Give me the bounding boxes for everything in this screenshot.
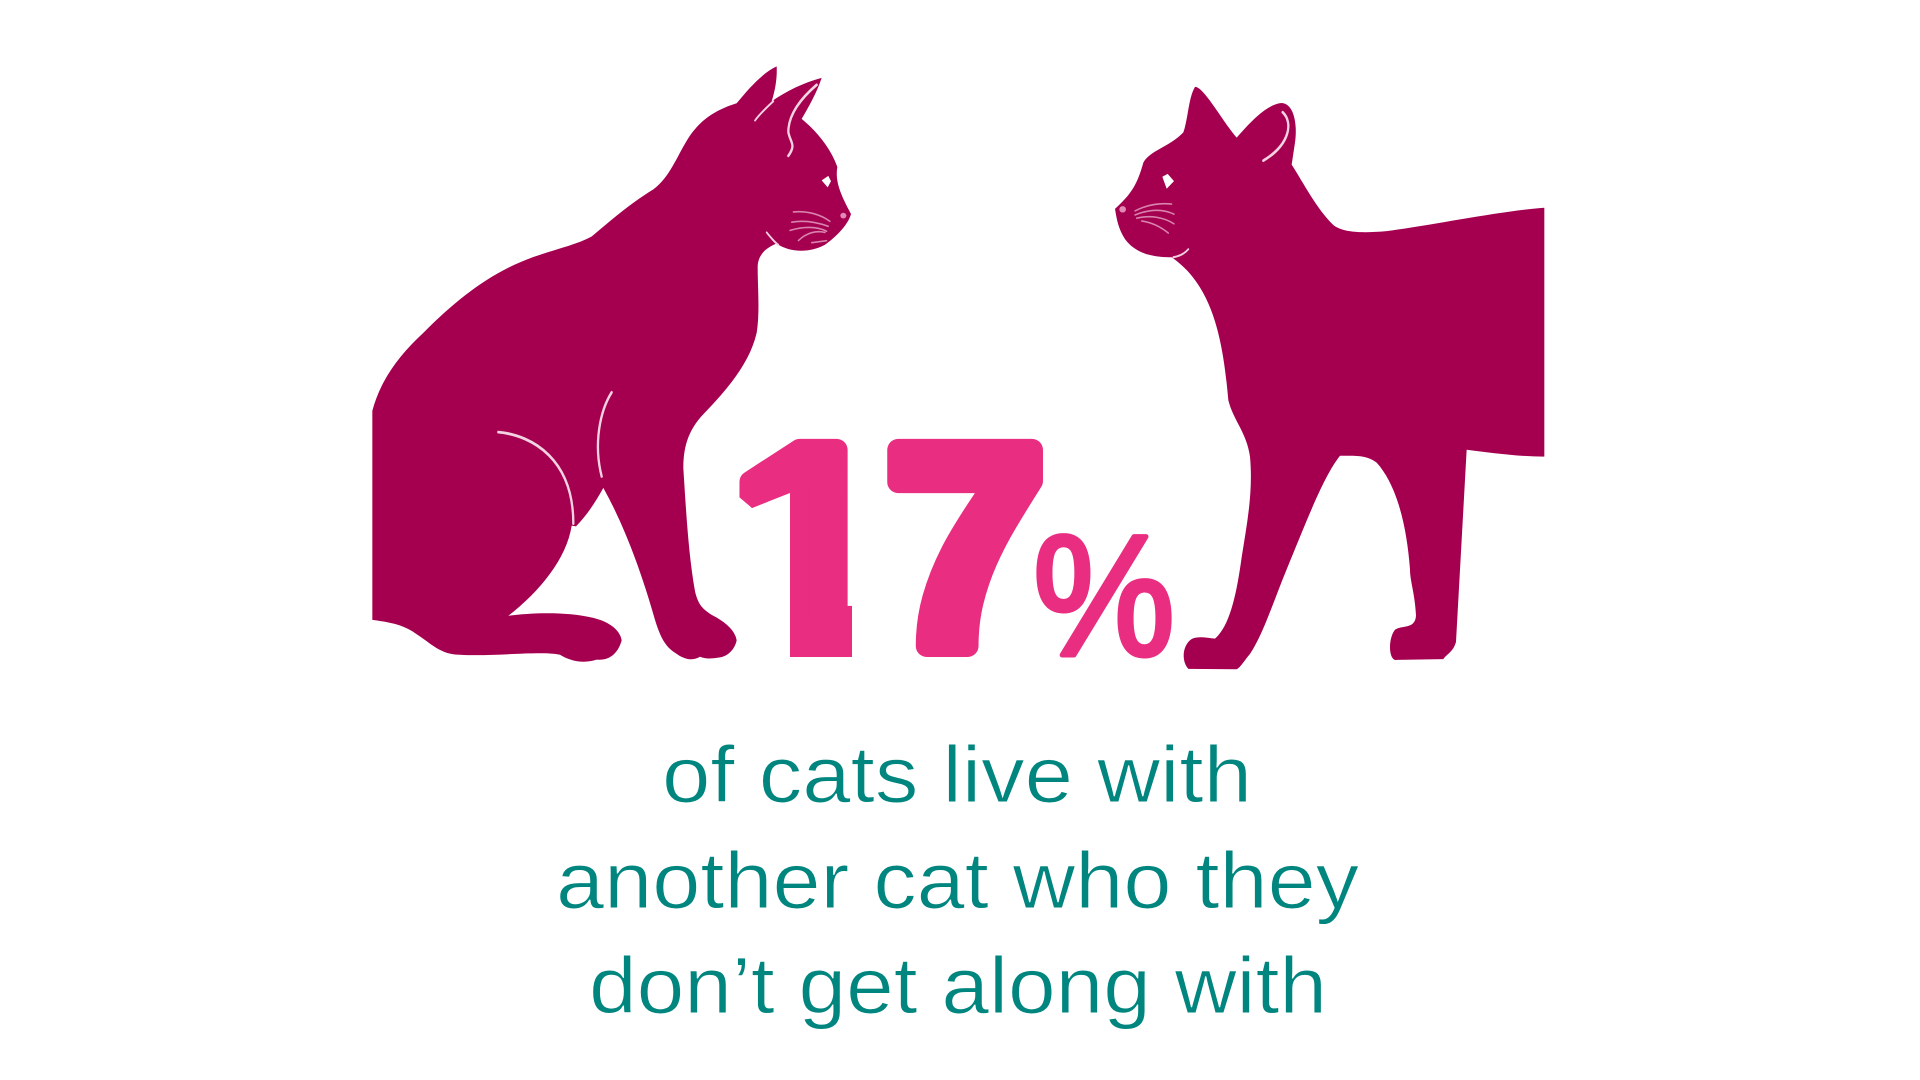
caption line 1: of cats live with [662, 730, 1252, 819]
caption text [556, 730, 1359, 1030]
caption line 2: another cat who they [556, 836, 1359, 925]
statistic: 17% [740, 438, 1172, 658]
percent sign: % [1033, 500, 1175, 692]
digit 7: 7 [886, 389, 1045, 707]
icon: right standing cat silhouette [1115, 87, 1544, 669]
icon: left sitting cat silhouette [372, 66, 851, 662]
digit 1: 1 [731, 389, 890, 707]
caption line 3: don’t get along with [589, 941, 1327, 1030]
